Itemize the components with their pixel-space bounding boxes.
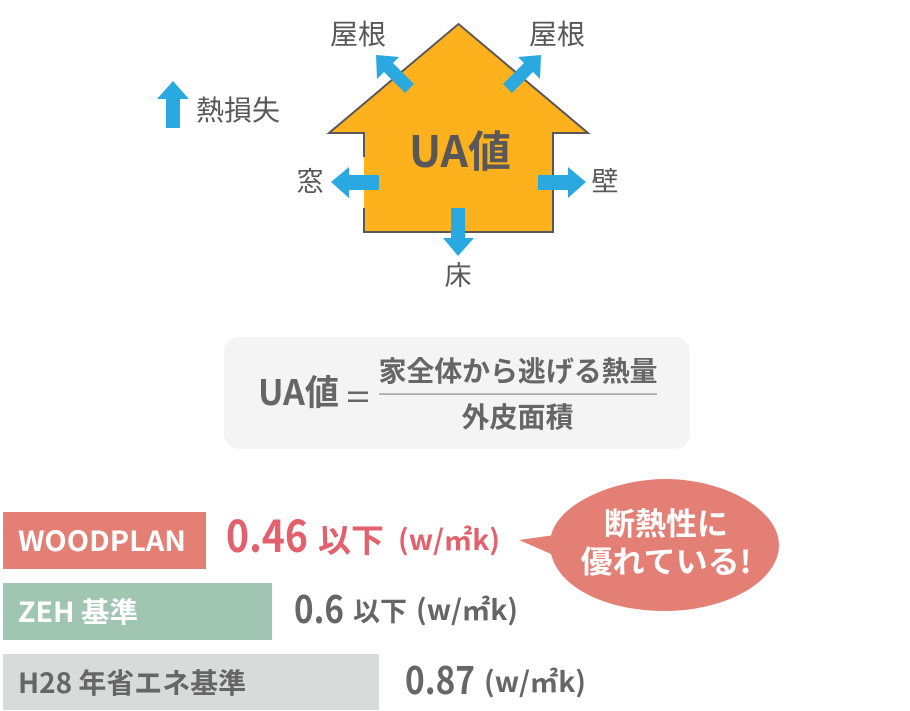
bar fill bbox=[3, 654, 379, 710]
bar fill bbox=[3, 512, 206, 569]
unit: (w/㎡k) bbox=[398, 519, 500, 559]
arrow: roof left bbox=[376, 55, 414, 93]
unit: (w/㎡k) bbox=[416, 589, 518, 629]
speech bubble bbox=[519, 479, 779, 611]
panel: UA formula bbox=[224, 337, 690, 449]
callout line 2: 優れている! bbox=[580, 537, 752, 582]
bar label: ZEH 基準 bbox=[18, 591, 138, 631]
denominator: 外皮面積 bbox=[461, 396, 574, 436]
callout line 1: 断熱性に bbox=[604, 499, 728, 544]
UA value label: UA値 bbox=[409, 118, 511, 180]
formula left side: UA値 bbox=[258, 365, 339, 416]
arrow: roof right bbox=[503, 55, 541, 93]
value: 0.46 bbox=[226, 501, 308, 565]
bar fill bbox=[3, 583, 272, 640]
value: 0.6 bbox=[294, 579, 344, 634]
numerator: 家全体から逃げる熱量 bbox=[378, 350, 658, 390]
label: roof right: 屋根 bbox=[529, 13, 585, 53]
legend: heat loss bbox=[157, 81, 280, 129]
formula background bbox=[224, 337, 690, 449]
legend text: 熱損失 bbox=[196, 89, 280, 129]
bar: H28 bbox=[3, 650, 586, 710]
fraction line bbox=[379, 394, 657, 395]
unit: (w/㎡k) bbox=[484, 661, 586, 701]
callout: better insulation bbox=[519, 479, 779, 611]
label: window: 窓 bbox=[296, 160, 324, 199]
bar: ZEH bbox=[3, 579, 518, 640]
arrow: wall bbox=[538, 167, 586, 198]
label: roof left: 屋根 bbox=[330, 13, 386, 53]
label: wall: 壁 bbox=[592, 160, 618, 199]
arrow: floor bbox=[443, 208, 474, 256]
value: 0.87 bbox=[405, 650, 475, 705]
bar: WOODPLAN bbox=[3, 501, 500, 569]
house body bbox=[329, 24, 588, 232]
bar label: H28 年省エネ基準 bbox=[18, 662, 246, 702]
bar label: WOODPLAN bbox=[18, 520, 186, 560]
icon: up arrow bbox=[157, 81, 189, 128]
qualifier: 以下 bbox=[353, 590, 407, 629]
qualifier: 以下 bbox=[318, 514, 384, 562]
house diagram bbox=[296, 13, 618, 293]
arrow: window bbox=[331, 167, 379, 198]
label: floor: 床 bbox=[444, 254, 472, 293]
equals sign bbox=[348, 392, 368, 402]
